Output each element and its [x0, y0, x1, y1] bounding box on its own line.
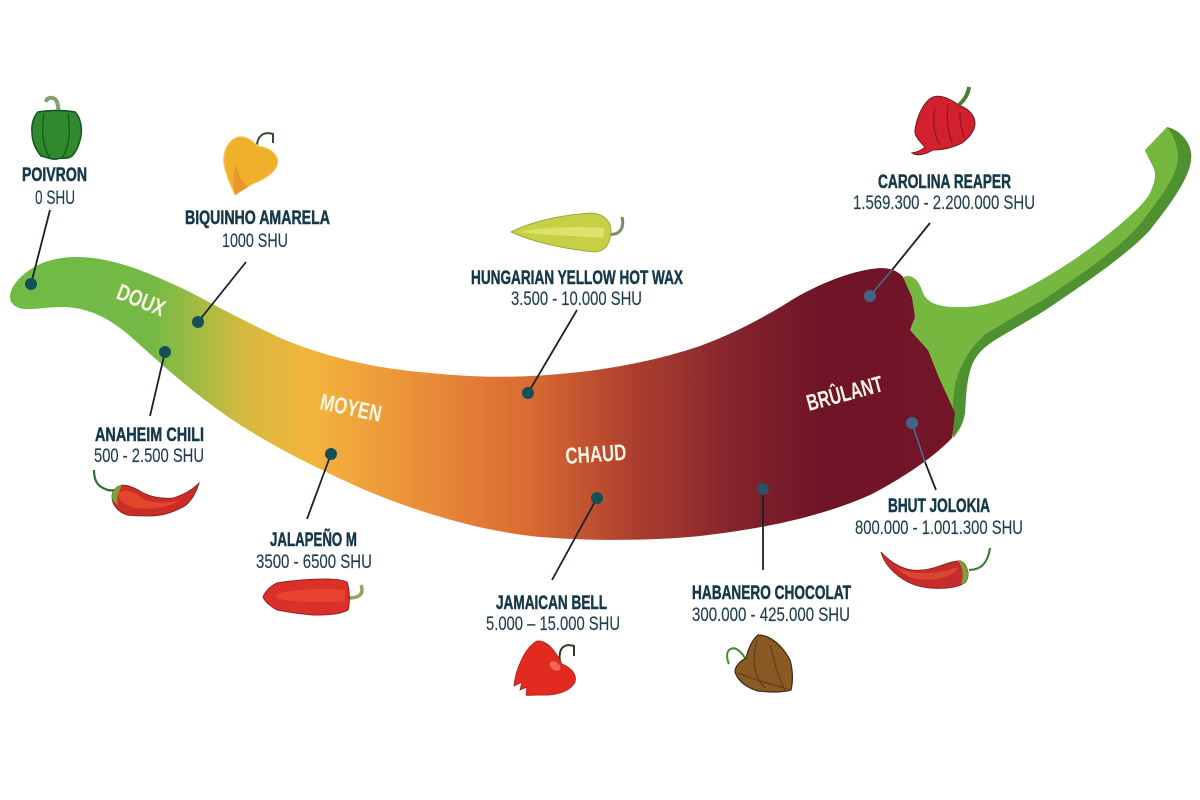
- label: biquinho amarela: 1000 SHU: [222, 231, 288, 252]
- label: biquinho amarela: [185, 207, 330, 252]
- icon: carolina reaper: [912, 87, 975, 155]
- label: bhut jolokia: 800.000 - 1.001.300 SHU: [855, 518, 1023, 539]
- label: hungarian yellow hot wax: HUNGARIAN YELLOW HOT WAX: [471, 267, 683, 289]
- label: carolina reaper: 1.569.300 - 2.200.000 SHU: [853, 193, 1035, 214]
- label: poivron: [22, 164, 87, 209]
- label: jalapeño: 3500 - 6500 SHU: [256, 552, 372, 573]
- zone label: doux: DOUX: [113, 279, 170, 322]
- label: jalapeño: JALAPEÑO M: [270, 528, 357, 551]
- label: biquinho amarela: BIQUINHO AMARELA: [185, 207, 330, 229]
- label: anaheim chili: ANAHEIM CHILI: [95, 424, 204, 446]
- label: anaheim chili: [94, 424, 204, 467]
- icon: bhut jolokia: [881, 548, 990, 588]
- marker: carolina reaper: [864, 223, 930, 302]
- label: habanero chocolat: HABANERO CHOCOLAT: [692, 582, 851, 604]
- icon: hungarian yellow wax pepper: [511, 213, 623, 252]
- label: carolina reaper: CAROLINA REAPER: [878, 171, 1011, 193]
- label: jamaican bell: 5.000 – 15.000 SHU: [486, 614, 620, 635]
- label: poivron: POIVRON: [22, 164, 87, 186]
- zone label: moyen: MOYEN: [318, 388, 384, 427]
- pepper body with heat gradient: [10, 257, 955, 540]
- marker: jalapeño: [307, 448, 337, 519]
- label: hungarian yellow hot wax: 3.500 - 10.000 SHU: [511, 289, 642, 310]
- marker: hungarian yellow hot wax: [522, 310, 577, 399]
- label: anaheim chili: 500 - 2.500 SHU: [94, 446, 204, 467]
- label: bhut jolokia: BHUT JOLOKIA: [888, 495, 990, 517]
- marker: biquinho amarela: [192, 262, 246, 328]
- illustration: giant pepper heat scale: [10, 127, 1191, 540]
- icon: red jalapeño: [263, 579, 362, 615]
- icon: anaheim chili: [94, 470, 199, 516]
- label: jamaican bell: [486, 592, 620, 635]
- icon: yellow biquinho pepper: [224, 133, 278, 195]
- label: jamaican bell: JAMAICAN BELL: [496, 592, 607, 614]
- label: hungarian yellow hot wax: [471, 267, 683, 310]
- zone label: brûlant: BRÛLANT: [803, 370, 886, 416]
- marker: poivron: [25, 210, 50, 290]
- zone label: chaud: CHAUD: [565, 439, 627, 469]
- icon: habanero chocolat: [727, 635, 792, 692]
- label: carolina reaper: [853, 171, 1035, 214]
- marker: habanero chocolat: [757, 483, 769, 570]
- icon: green bell pepper: [32, 98, 81, 159]
- marker: bhut jolokia: [906, 417, 936, 490]
- label: bhut jolokia: [855, 495, 1023, 539]
- marker: jamaican bell: [552, 492, 603, 580]
- label: jalapeño: [256, 528, 372, 573]
- pepper stem: [903, 127, 1191, 438]
- label: habanero chocolat: 300.000 - 425.000 SHU: [692, 605, 850, 626]
- icon: red jamaican bell: [514, 641, 575, 695]
- marker: anaheim chili: [150, 346, 171, 416]
- label: poivron: 0 SHU: [35, 188, 75, 209]
- label: habanero chocolat: [692, 582, 851, 626]
